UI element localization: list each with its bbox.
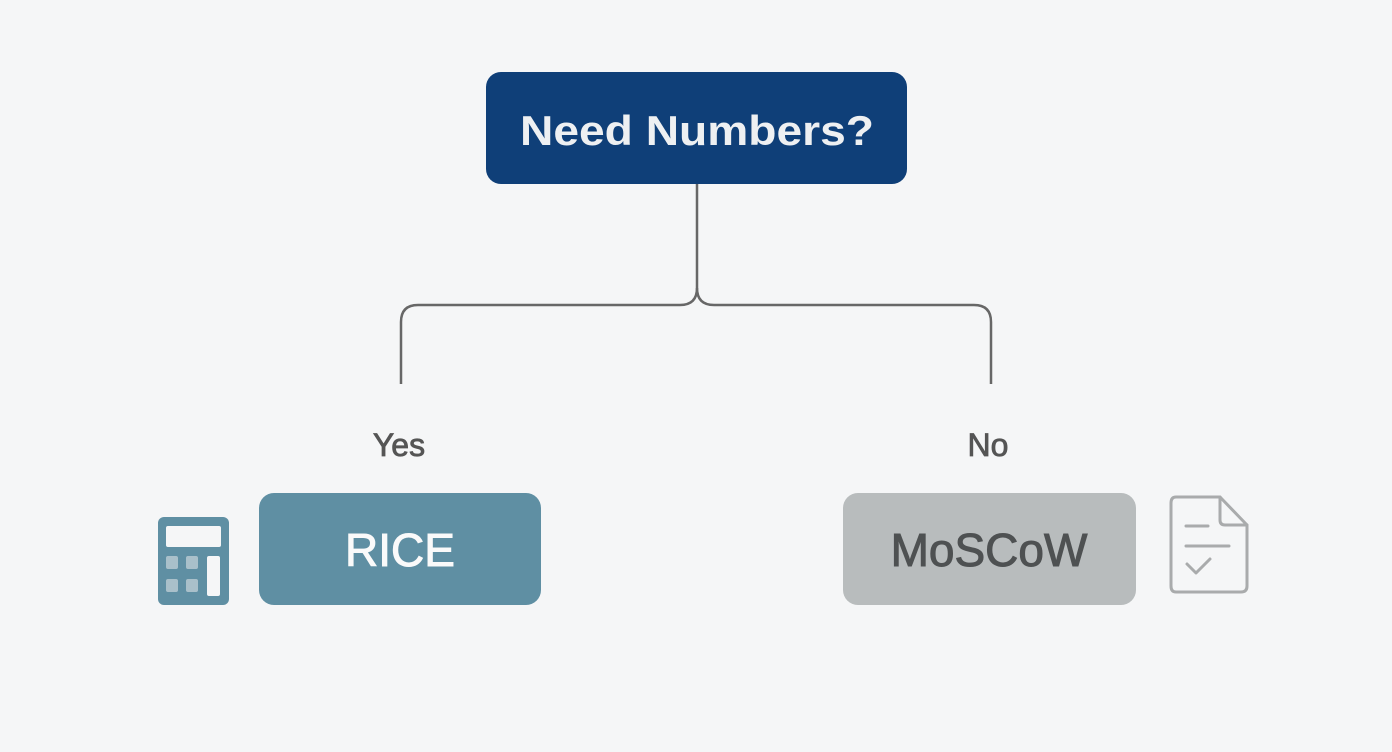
box: RICE: [259, 493, 541, 605]
label: No: No: [968, 427, 1008, 463]
box: MoSCoW: [843, 493, 1136, 605]
label: Yes: Yes: [373, 427, 425, 463]
box: MoSCoW: MoSCoW: [891, 524, 1088, 576]
box: RICE: RICE: [345, 524, 455, 576]
connector lines: [401, 184, 991, 384]
title box: Need Numbers?: Need Numbers?: [520, 107, 874, 154]
title box: Need Numbers?: [486, 72, 907, 184]
icon: document with checkmark: [1171, 497, 1247, 592]
icon: calculator: [158, 517, 229, 605]
